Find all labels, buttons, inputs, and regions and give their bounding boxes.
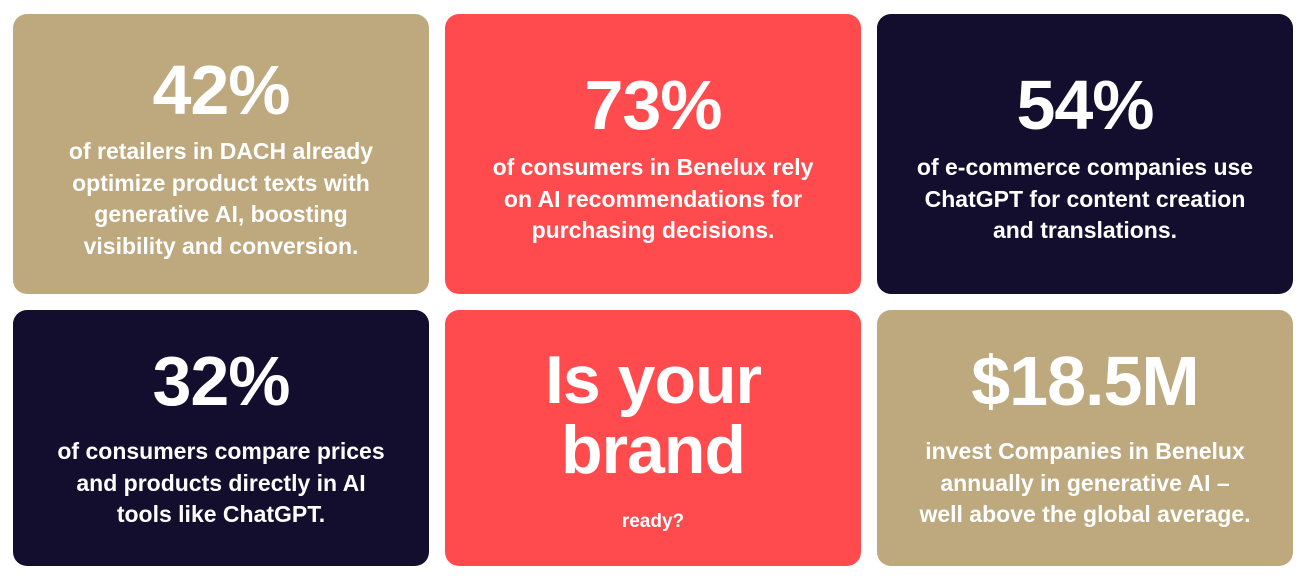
text: Benelux consumers description <box>493 154 814 243</box>
text: DACH description: of retailers in DACH already <box>69 138 373 164</box>
panel: Benelux consumers <box>445 14 861 294</box>
text: Benelux consumers description: purchasing decisions. <box>532 217 774 243</box>
panel: price comparison <box>13 310 429 566</box>
panel: Benelux investment <box>877 310 1293 566</box>
heading: Is your brand: Is your <box>545 342 761 418</box>
stat: 54%: 54% <box>1016 66 1154 144</box>
text: investment description: well above the global average. <box>919 501 1251 527</box>
text: DACH description: generative AI, boosting <box>94 201 348 227</box>
text: e-commerce description: and translations. <box>993 217 1177 243</box>
text: investment description: annually in generative AI – <box>940 470 1230 496</box>
text: Benelux consumers description: of consumers in Benelux rely <box>493 154 813 180</box>
text: DACH description: visibility and conversion. <box>84 232 358 258</box>
stat: 42%: 42% <box>152 51 290 129</box>
text: e-commerce description: ChatGPT for content creation <box>925 186 1245 212</box>
stat: $18.5M: $18.5M <box>971 342 1199 420</box>
heading: Is your brand <box>545 342 761 488</box>
text: e-commerce description <box>917 154 1253 243</box>
panel: DACH retailers <box>13 14 429 294</box>
stat: 73%: 73% <box>584 66 722 144</box>
text: Benelux consumers description: on AI recommendations for <box>504 186 802 212</box>
text: comparison description <box>57 438 385 527</box>
text: investment description: invest Companies in Benelux <box>925 438 1245 464</box>
text: comparison description: tools like ChatGPT. <box>117 501 325 527</box>
text: comparison description: and products directly in AI <box>76 470 366 496</box>
text: ready?: ready? <box>622 511 684 532</box>
text: DACH description <box>69 138 373 259</box>
panel: call to action <box>445 310 861 566</box>
text: comparison description: of consumers compare prices <box>57 438 385 464</box>
panel: e-commerce companies <box>877 14 1293 294</box>
text: investment description <box>919 438 1251 527</box>
heading: Is your brand: brand <box>561 412 745 488</box>
text: DACH description: optimize product texts with <box>72 170 370 196</box>
stat: 32%: 32% <box>152 342 290 420</box>
text: e-commerce description: of e-commerce companies use <box>917 154 1253 180</box>
